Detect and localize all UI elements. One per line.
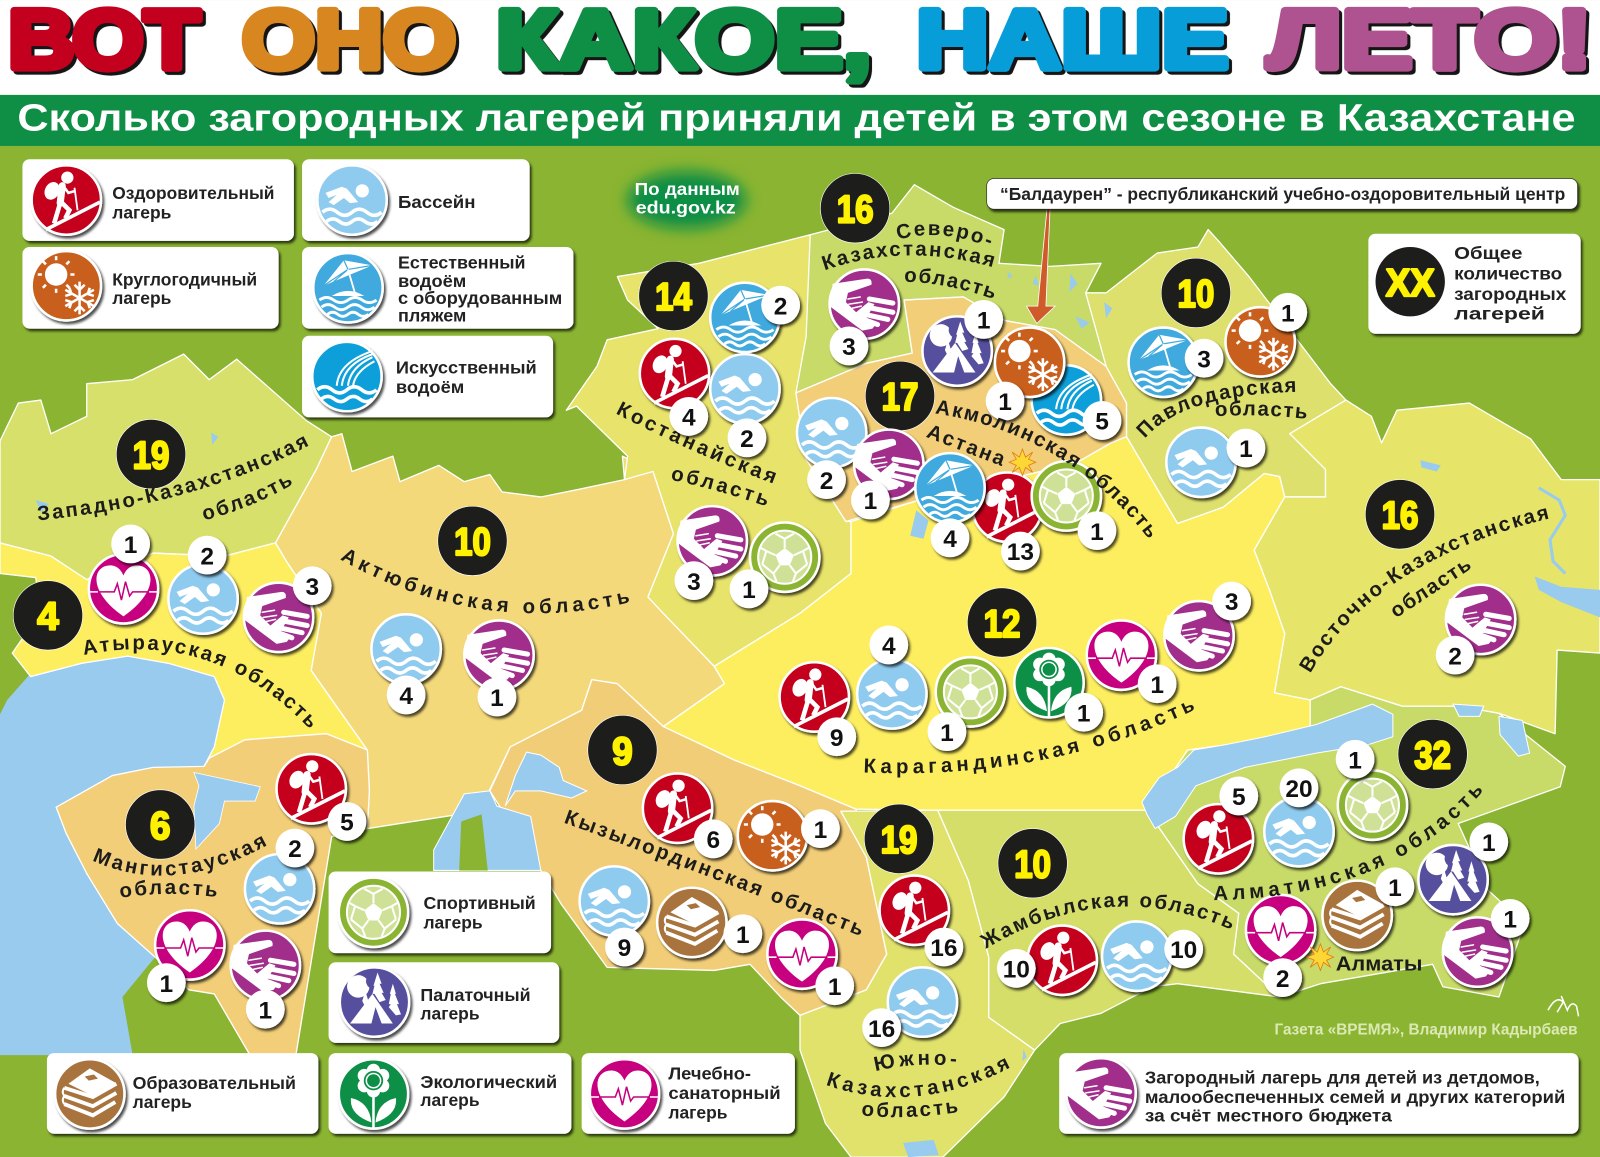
panel: Atyrau region xyxy=(12,566,336,728)
marker: year-round 1: 1 xyxy=(998,389,1012,416)
legend: medical camp xyxy=(582,1053,795,1134)
legend: ecology camp: Экологический xyxy=(420,1072,557,1092)
marker: medical 1 xyxy=(89,525,158,624)
marker: hike 4 xyxy=(640,339,709,436)
marker: hand 1: 1 xyxy=(259,997,272,1024)
marker: hand 2: 2 xyxy=(1448,643,1462,670)
marker: pool 16: 16 xyxy=(868,1016,895,1043)
marker: beach 4 xyxy=(915,453,985,557)
legend: natural water with beach: водоём xyxy=(398,271,466,291)
marker: hike 6 xyxy=(643,774,733,858)
title: main headline xyxy=(0,0,1600,95)
total badge 10: 10 xyxy=(1014,844,1051,887)
region label: Южно- xyxy=(874,1054,956,1071)
total badge 10 xyxy=(1161,258,1231,328)
marker: artificial water 5: 5 xyxy=(1095,409,1109,436)
total badge 14 xyxy=(639,261,708,331)
legend: health camp: лагерь xyxy=(112,202,171,222)
marker: hike 10 xyxy=(997,926,1097,995)
icon: Almaty star xyxy=(1307,944,1334,970)
marker: year-round 1 xyxy=(738,801,840,870)
region label line 3: область xyxy=(862,1102,958,1118)
region label: Павлодарская xyxy=(1136,381,1296,438)
total badge 32: 32 xyxy=(1414,734,1451,777)
legend: sports camp xyxy=(329,871,551,953)
legend: year-round camp: лагерь xyxy=(112,288,171,308)
region label: Алматинская область xyxy=(1214,788,1482,900)
total badge 32 xyxy=(1398,719,1467,789)
total badge 16 xyxy=(820,173,890,243)
marker: sport 1: 1 xyxy=(1090,519,1104,546)
panel: Karaganda region xyxy=(778,582,1255,778)
marker: ecology 1 xyxy=(1014,648,1103,732)
total badge 6: 6 xyxy=(150,805,170,848)
panel: Kostanay region xyxy=(616,261,824,613)
panel: Akmola region xyxy=(796,210,1152,575)
panel: Aktobe region xyxy=(340,506,629,721)
marker: pool 4: 4 xyxy=(882,633,896,660)
region label line 2: область xyxy=(672,470,767,506)
marker: medical 1: 1 xyxy=(124,532,137,559)
marker: tent 1: 1 xyxy=(977,308,990,335)
icon: author signature xyxy=(1548,996,1579,1016)
region label: Кызылординская область xyxy=(564,810,862,935)
marker: hike 16 xyxy=(880,876,963,966)
marker: medical 1: 1 xyxy=(160,971,173,998)
marker: pool 1 xyxy=(1166,428,1265,497)
marker: hand 3: 3 xyxy=(842,334,856,361)
icon: Astana star xyxy=(1009,449,1036,476)
marker: pool 1: 1 xyxy=(1239,436,1253,463)
marker: year-round 1 xyxy=(1226,293,1307,377)
marker: hike 10: 10 xyxy=(1003,957,1030,984)
marker: hike 9: 9 xyxy=(830,725,844,752)
marker: pool 20: 20 xyxy=(1285,776,1313,803)
marker: pool 2: 2 xyxy=(820,468,833,495)
marker: pool 9: 9 xyxy=(618,935,631,962)
region label: Актюбинская область xyxy=(340,550,629,614)
marker: hand 3 xyxy=(244,566,332,652)
marker: hand 3: 3 xyxy=(1225,589,1238,616)
total badge 16 xyxy=(1365,480,1435,549)
region label: Карагандинская область xyxy=(864,703,1194,778)
region label: Мангистауская xyxy=(93,836,266,876)
marker: beach 3 xyxy=(1129,328,1223,397)
marker: hike 5 xyxy=(1184,777,1258,874)
marker: pool 2: 2 xyxy=(288,836,302,863)
total badge 4 xyxy=(13,581,83,650)
legend: budget camp for children xyxy=(1059,1053,1579,1134)
marker: pool 16 xyxy=(862,967,957,1047)
marker: hike 6: 6 xyxy=(706,827,720,854)
marker: pool 4 xyxy=(857,626,927,729)
marker: medical 2 xyxy=(1246,895,1315,997)
total badge 19 xyxy=(116,419,186,489)
legend: tent camp: лагерь xyxy=(420,1003,480,1023)
total badge 16: 16 xyxy=(837,188,873,231)
marker: hand 1 xyxy=(464,620,534,716)
legend: education camp xyxy=(47,1053,318,1134)
legend: tent camp: Палаточный xyxy=(420,985,531,1005)
region label line 2: область xyxy=(1392,563,1470,616)
region label line 2: область xyxy=(203,478,292,520)
source note: edu.gov.kz: edu.gov.kz xyxy=(636,197,736,217)
marker: medical 2: 2 xyxy=(1276,966,1289,993)
region label line 2: Казахстанская xyxy=(826,1058,1010,1098)
region label line 2: область xyxy=(1216,400,1306,418)
legend: artificial water: водоём xyxy=(396,377,464,397)
legend: total count: количество xyxy=(1454,264,1562,284)
marker: hand 3: 3 xyxy=(687,569,701,596)
marker: hike 13 xyxy=(972,472,1042,570)
marker: pool 2: 2 xyxy=(200,543,214,570)
marker: sport 1 xyxy=(1032,461,1116,550)
legend: budget camp for children: Загородный лагерь для детей из детдомов, xyxy=(1145,1068,1540,1088)
legend: medical camp: санаторный xyxy=(668,1083,781,1103)
legend: sports camp: Спортивный xyxy=(423,893,536,913)
source note: edu.gov.kz: По данным xyxy=(635,179,740,199)
panel: South Kazakhstan region xyxy=(826,804,1010,1118)
marker: hand 1: 1 xyxy=(1503,907,1517,934)
marker: hand 1 xyxy=(231,931,300,1029)
legend: artificial water xyxy=(302,336,553,417)
city label: Astana: Астана xyxy=(926,426,1004,466)
total badge 9: 9 xyxy=(612,730,633,773)
total badge 10 xyxy=(438,506,507,576)
legend: total count: Общее xyxy=(1454,243,1523,263)
total badge 9 xyxy=(588,715,657,785)
marker: sport 1 xyxy=(928,657,1005,751)
total badge 17 xyxy=(865,361,935,431)
marker: hand 1 xyxy=(1443,899,1530,987)
region label: Северо- xyxy=(896,224,992,244)
region label: Акмолинская область xyxy=(935,400,1152,538)
panel: Zhambyl region xyxy=(979,828,1232,1001)
marker: hand 3: 3 xyxy=(305,574,319,601)
marker: pool 2 xyxy=(710,354,780,457)
panel: Mangystau region xyxy=(93,752,370,1033)
arrow: Baldauren pointer xyxy=(1027,209,1055,323)
legend: medical camp: Лечебно- xyxy=(668,1064,751,1084)
legend: ecology camp: лагерь xyxy=(420,1090,480,1110)
marker: hand 3 xyxy=(674,506,747,600)
total badge 10 xyxy=(998,829,1067,898)
marker: pool 4: 4 xyxy=(399,683,413,710)
panel: Kyzylorda region xyxy=(564,715,862,1010)
callout: Baldauren centre: “Балдаурен” - республиканский учебно-оздоровительный центр xyxy=(1000,184,1565,204)
marker: pool 2 xyxy=(168,536,238,634)
region label: Атырауская область xyxy=(84,638,313,728)
legend: ecology camp xyxy=(329,1053,571,1134)
marker: tent 1 xyxy=(922,300,1003,386)
marker: sport 1: 1 xyxy=(742,577,756,604)
marker: medical 1 xyxy=(767,919,854,1005)
marker: education 1 xyxy=(1322,867,1414,950)
legend: sports camp: лагерь xyxy=(423,913,483,933)
marker: pool 4 xyxy=(371,614,441,714)
marker: education 1 xyxy=(657,888,762,957)
marker: hike 4: 4 xyxy=(682,405,696,432)
marker: hand 3 xyxy=(1164,582,1251,670)
total badge 4: 4 xyxy=(37,596,59,639)
legend: tent camp xyxy=(329,962,559,1043)
panel: East Kazakhstan region xyxy=(1298,479,1548,679)
marker: year-round 1 xyxy=(986,328,1064,420)
marker: beach 2: 2 xyxy=(774,293,787,320)
marker: pool 2 xyxy=(245,829,314,924)
marker: tent 1 xyxy=(1418,822,1508,914)
marker: beach 4: 4 xyxy=(943,526,957,553)
total badge 17: 17 xyxy=(882,376,918,419)
city label: Almaty: Алматы xyxy=(1336,953,1422,975)
marker: pool 2 xyxy=(797,398,866,499)
marker: hand 2 xyxy=(1436,585,1515,675)
legend: natural water with beach: пляжем xyxy=(398,305,466,325)
region label line 3: область xyxy=(905,268,994,298)
legend: pool: Бассейн xyxy=(398,192,476,212)
marker: pool 9 xyxy=(580,866,649,966)
marker: hike 16: 16 xyxy=(930,935,957,962)
legend: health camp xyxy=(22,159,294,241)
marker: hand 3 xyxy=(830,269,899,365)
legend: budget camp for children: за счёт местного бюджета xyxy=(1145,1105,1392,1125)
legend: artificial water: Искусственный xyxy=(396,357,537,377)
panel: North Kazakhstan region xyxy=(820,173,994,370)
region label: Восточно-Казахстанская xyxy=(1298,508,1548,672)
panel: West Kazakhstan region xyxy=(38,419,308,640)
marker: medical 1: 1 xyxy=(828,974,841,1001)
marker: tent 1: 1 xyxy=(1482,830,1496,857)
panel: Pavlodar region xyxy=(1127,258,1311,503)
marker: pool 20 xyxy=(1264,768,1334,866)
marker: sport 1: 1 xyxy=(1348,747,1362,774)
total badge 10: 10 xyxy=(454,521,491,564)
legend: education camp: Образовательный xyxy=(133,1073,296,1093)
marker: sport 1 xyxy=(1336,740,1407,840)
legend: health camp: Оздоровительный xyxy=(112,183,274,203)
marker: year-round 1: 1 xyxy=(814,817,827,844)
region label line 2: область xyxy=(120,880,216,898)
marker: sport 1: 1 xyxy=(940,720,954,747)
legend: natural water with beach: с оборудованным xyxy=(398,288,562,308)
marker: medical 1 xyxy=(147,910,224,1002)
legend: natural water with beach xyxy=(302,247,573,329)
region label: Жамбылская область xyxy=(979,894,1232,949)
marker: hike 5 xyxy=(277,754,366,841)
marker: beach 2 xyxy=(710,283,800,352)
legend: total count: лагерей xyxy=(1454,303,1545,323)
region label: Костанайская xyxy=(616,401,776,484)
legend: natural water with beach: Естественный xyxy=(398,252,526,272)
marker: hand 1 xyxy=(851,430,923,519)
total badge 19 xyxy=(864,804,934,874)
region label line 2: Казахстанская xyxy=(822,244,994,270)
legend: total count: загородных xyxy=(1454,284,1567,304)
legend: total count: ХХ xyxy=(1386,262,1435,305)
legend: education camp: лагерь xyxy=(133,1092,192,1112)
marker: year-round 1: 1 xyxy=(1281,300,1295,327)
marker: sport 1 xyxy=(730,522,819,608)
total badge 19: 19 xyxy=(133,434,169,477)
legend: year-round camp xyxy=(22,247,279,329)
marker: beach 3: 3 xyxy=(1197,346,1211,373)
panel: Almaty region xyxy=(1182,719,1534,1002)
total badge 19: 19 xyxy=(881,819,917,862)
source note: edu.gov.kz xyxy=(628,171,746,229)
total badge 12 xyxy=(967,588,1037,657)
total badge 10: 10 xyxy=(1178,273,1214,316)
legend: pool xyxy=(302,159,530,241)
marker: hand 1: 1 xyxy=(490,685,504,712)
marker: hike 5: 5 xyxy=(1232,784,1246,811)
legend: year-round camp: Круглогодичный xyxy=(112,270,257,290)
total badge 6 xyxy=(126,790,195,859)
marker: pool 10 xyxy=(1102,921,1203,991)
marker: ecology 1: 1 xyxy=(1077,700,1090,727)
marker: hike 5: 5 xyxy=(340,810,354,837)
marker: hike 13: 13 xyxy=(1007,539,1034,566)
marker: education 1: 1 xyxy=(1388,875,1402,902)
heading: green subtitle banner: Сколько загородных лагерей приняли детей в этом сезоне в Казахстане xyxy=(17,97,1576,139)
legend: total count xyxy=(1368,234,1581,334)
marker: medical 1 xyxy=(1087,620,1177,703)
total badge 16: 16 xyxy=(1382,495,1418,538)
legend: budget camp for children: малообеспеченных семей и других категорий xyxy=(1145,1087,1565,1107)
marker: hand 1: 1 xyxy=(864,488,877,515)
total badge 14: 14 xyxy=(655,276,692,319)
callout: Baldauren centre xyxy=(987,179,1578,209)
credit: Газета «ВРЕМЯ», Владимир Кадырбаев xyxy=(1274,1022,1578,1039)
marker: education 1: 1 xyxy=(736,922,750,949)
marker: pool 10: 10 xyxy=(1170,937,1197,964)
marker: pool 2: 2 xyxy=(740,426,754,453)
marker: medical 1: 1 xyxy=(1150,672,1164,699)
marker: hike 9 xyxy=(780,662,856,756)
marker: artificial water 5 xyxy=(1032,365,1121,440)
region label: Западно-Казахстанская xyxy=(38,436,308,520)
total badge 12: 12 xyxy=(984,603,1020,646)
legend: medical camp: лагерь xyxy=(668,1102,728,1122)
